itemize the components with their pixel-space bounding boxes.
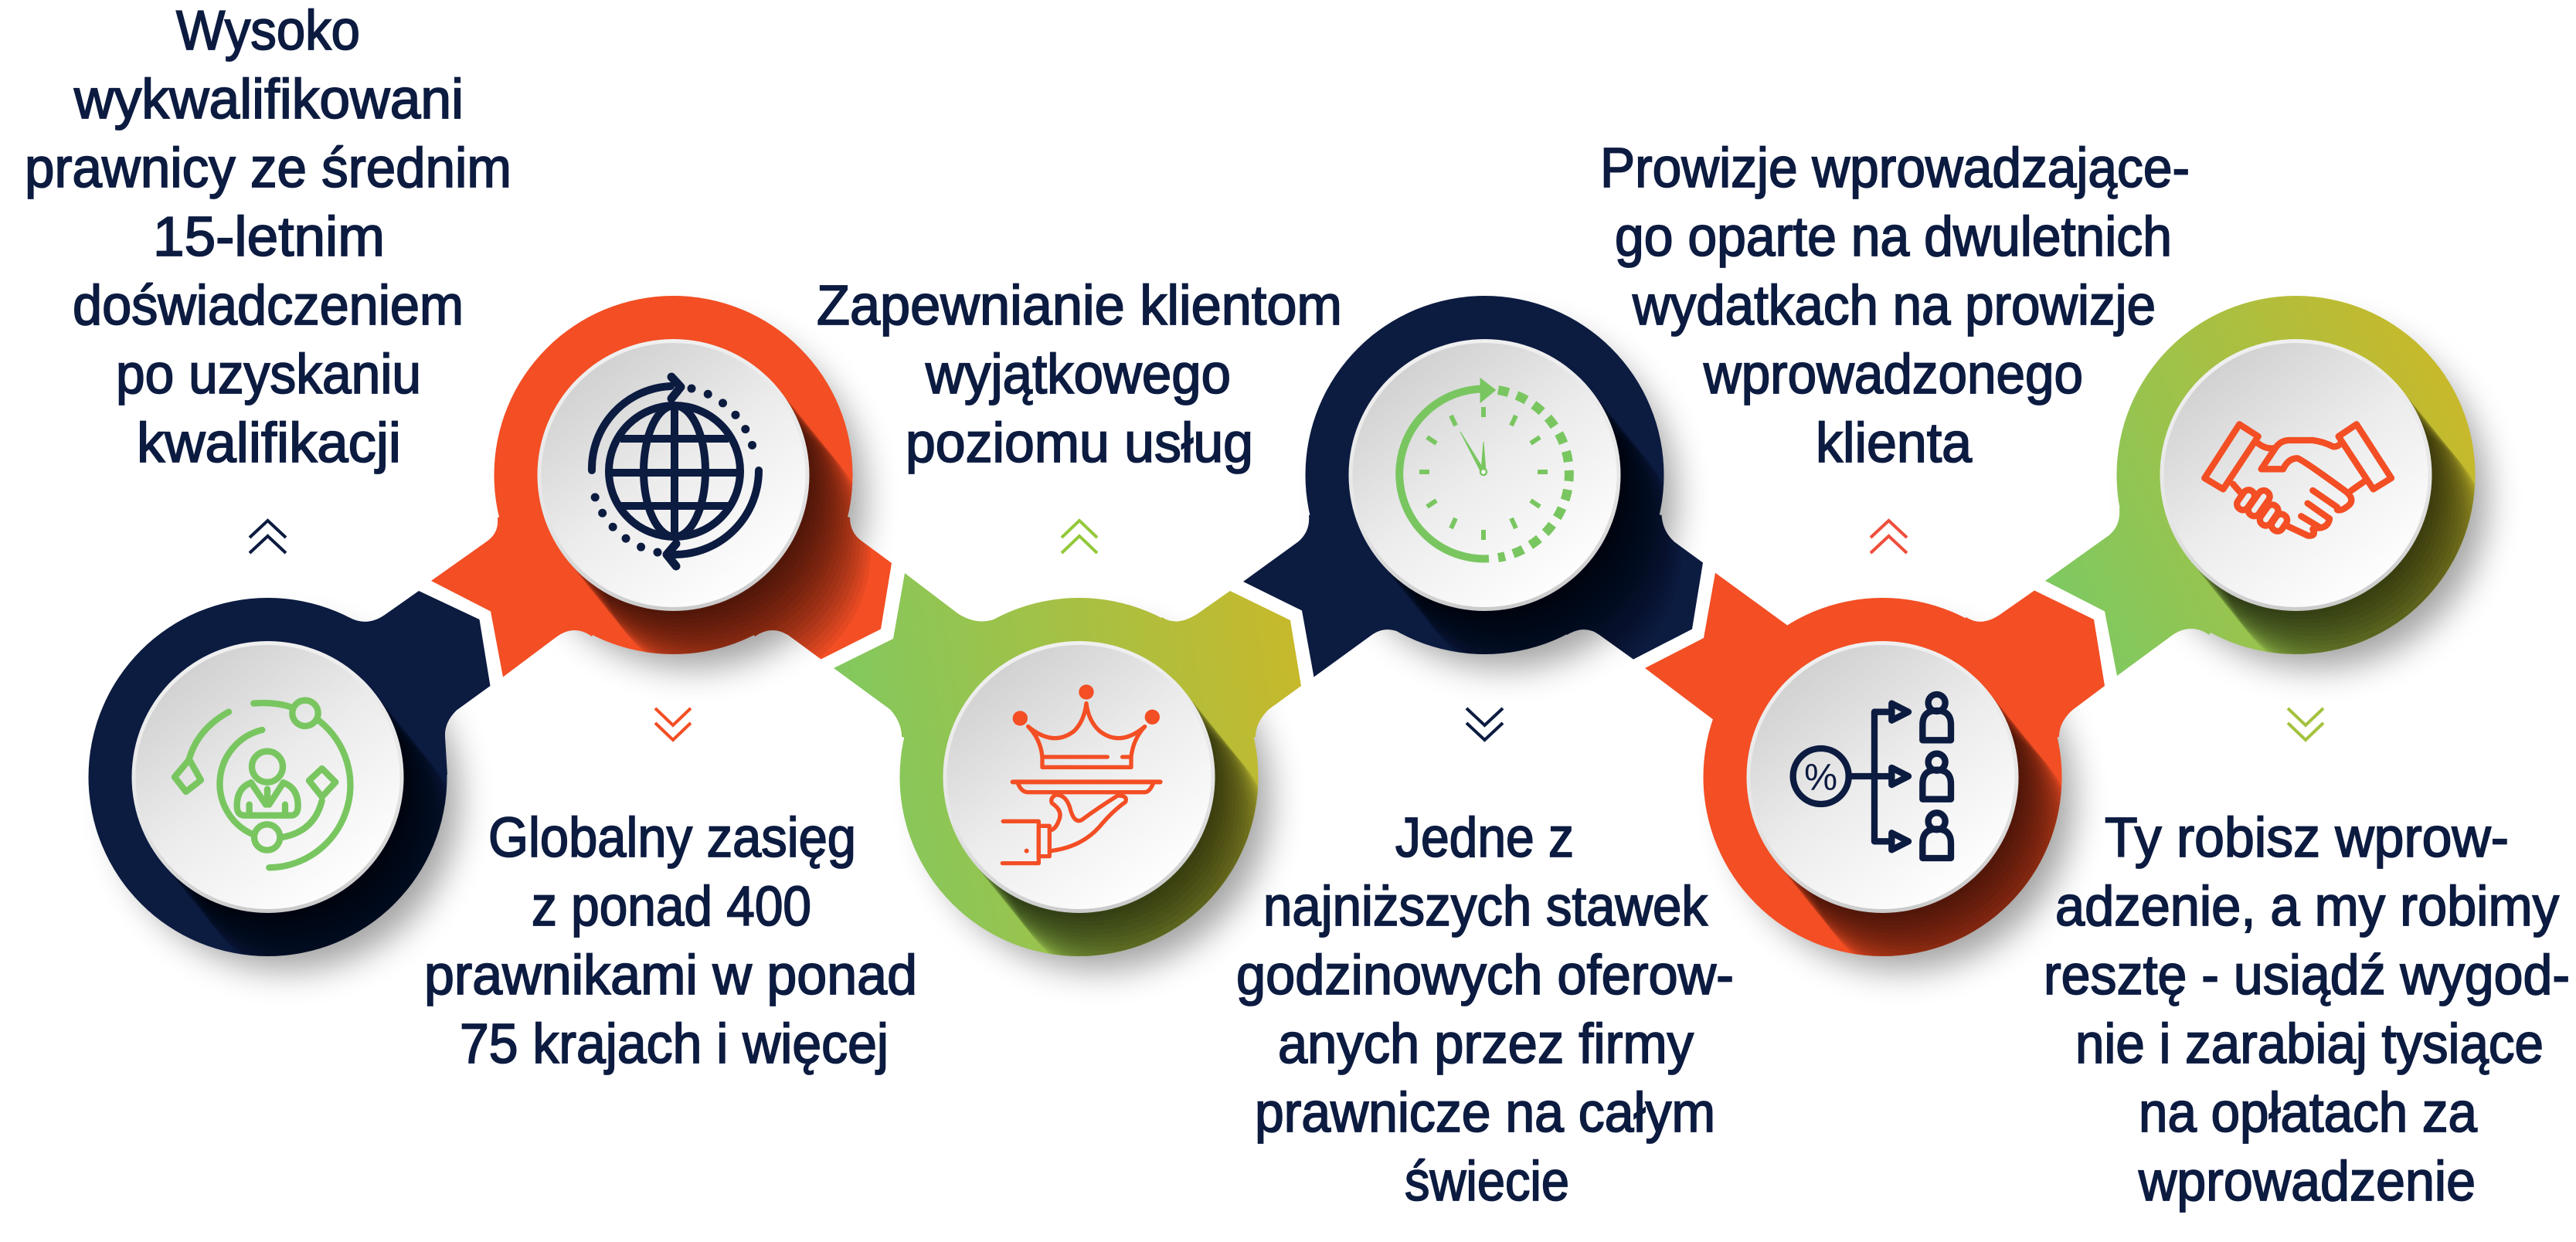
text block 5: referral commission: go oparte na dwuletnich	[1615, 206, 2172, 268]
text block 3: service level: wyjątkowego	[925, 344, 1231, 406]
text block 5: referral commission: Prowizje wprowadzające-	[1600, 137, 2190, 199]
text block 5: referral commission: wprowadzonego	[1703, 344, 2083, 406]
text block 4: lowest rates: najniższych stawek	[1263, 876, 1708, 938]
step 4 node: navy	[1243, 296, 1703, 687]
text block 6: you introduce: nie i zarabiaj tysiące	[2075, 1013, 2544, 1075]
text block 4: lowest rates: anych przez firmy	[1278, 1013, 1694, 1075]
chevrons: up, red	[1871, 521, 1907, 553]
text block 2: global reach: prawnikami w ponad	[424, 945, 917, 1006]
text block 1: qualified lawyers: wykwalifikowani	[73, 69, 464, 131]
icon: percent commission to three people	[1793, 694, 1951, 858]
text block 2: global reach	[424, 807, 917, 1075]
chevrons: up, green	[1062, 521, 1097, 553]
text block 4: lowest rates: świecie	[1405, 1151, 1569, 1213]
text block 1: qualified lawyers: 15-letnim	[153, 206, 385, 268]
step 3 node: green	[834, 573, 1301, 989]
text block 1: qualified lawyers: doświadczeniem	[73, 275, 464, 337]
text block 5: referral commission: wydatkach na prowizje	[1632, 275, 2156, 337]
text block 5: referral commission: klienta	[1816, 412, 1973, 474]
icon: clock with arrow	[1399, 380, 1569, 558]
step 5 node: orange	[1645, 573, 2105, 989]
step 2 node: orange	[431, 296, 892, 687]
text block 6: you introduce: Ty robisz wprow-	[2105, 807, 2509, 869]
chevrons: down, orange	[655, 708, 691, 740]
text block 1: qualified lawyers: kwalifikacji	[137, 412, 401, 474]
text block 3: service level	[817, 275, 1342, 474]
text block 1: qualified lawyers: Wysoko	[176, 0, 360, 62]
soft drop shadows	[116, 325, 2487, 970]
step 1 node: navy	[88, 591, 490, 989]
text block 4: lowest rates: prawnicze na całym	[1255, 1082, 1715, 1144]
icon: handshake	[2204, 424, 2391, 536]
icon: lawyer with orbit	[175, 701, 350, 867]
text block 6: you introduce: wprowadzenie	[2138, 1151, 2476, 1213]
text block 4: lowest rates: godzinowych oferow-	[1236, 945, 1734, 1006]
text block 5: referral commission	[1600, 137, 2190, 474]
text block 6: you introduce: na opłatach za	[2139, 1082, 2478, 1144]
icon: percent commission to three people: %	[1804, 757, 1837, 799]
step 6 node: green	[2045, 296, 2493, 687]
text block 4: lowest rates: Jedne z	[1395, 807, 1574, 869]
chevrons: down, green	[2288, 708, 2323, 740]
text block 2: global reach: Globalny zasięg	[488, 807, 856, 869]
text block 6: you introduce: adzenie, a my robimy	[2055, 876, 2559, 938]
text block 4: lowest rates	[1236, 807, 1734, 1213]
text block 1: qualified lawyers	[25, 0, 511, 474]
icon: globe with arrows	[592, 377, 759, 566]
text block 2: global reach: z ponad 400	[532, 876, 811, 938]
chevrons: down, navy	[1466, 708, 1503, 740]
text block 6: you introduce	[2044, 807, 2570, 1213]
icon: crown on tray	[1002, 684, 1161, 864]
chevrons: up, navy	[250, 521, 286, 553]
text block 3: service level: Zapewnianie klientom	[817, 275, 1342, 337]
text block 3: service level: poziomu usług	[906, 412, 1253, 474]
text block 2: global reach: 75 krajach i więcej	[460, 1013, 889, 1075]
text block 1: qualified lawyers: prawnicy ze średnim	[25, 137, 511, 199]
text block 1: qualified lawyers: po uzyskaniu	[116, 344, 421, 406]
